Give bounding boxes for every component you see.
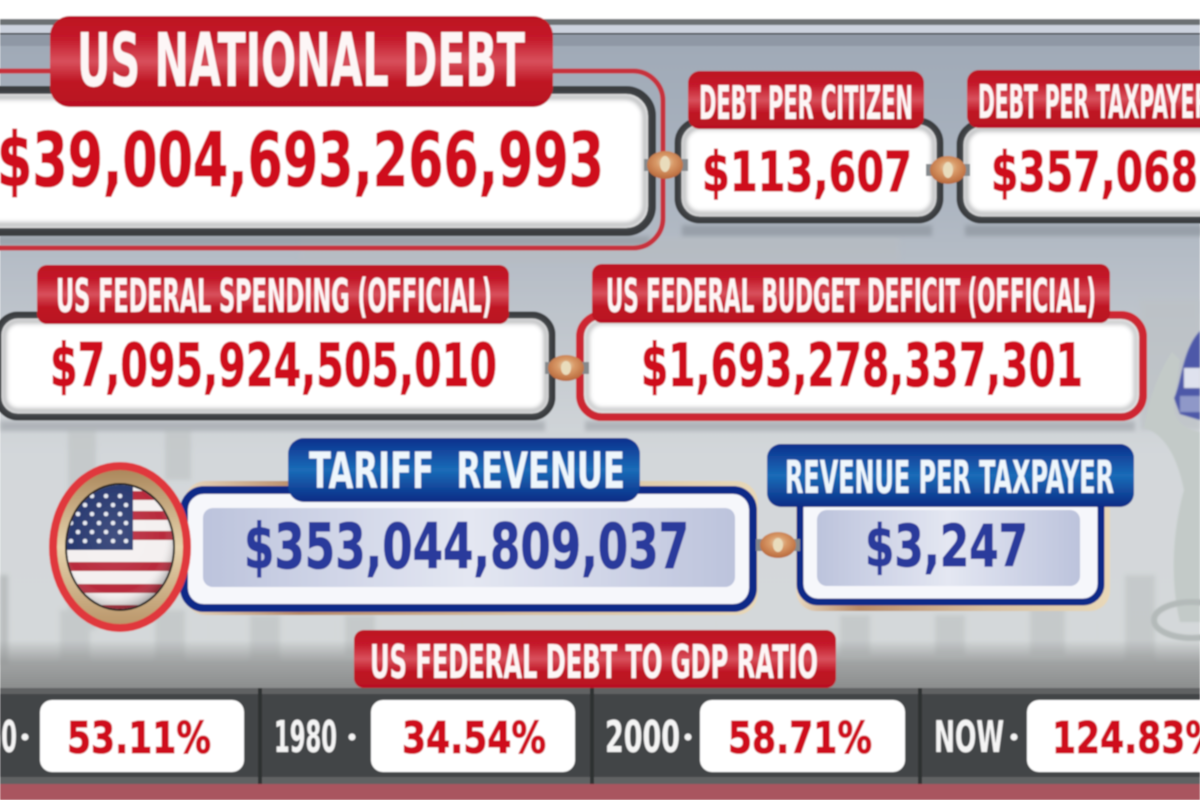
footer band (0, 784, 1200, 800)
connector: tariff to per taxpayer (756, 532, 800, 558)
icon: us flag medallion (53, 466, 187, 628)
era: 2000 (605, 700, 905, 772)
panel: tariff revenue (184, 438, 758, 615)
era: 1960 (0, 700, 244, 772)
value: national debt: $39,004,693,266,993 (0, 116, 604, 204)
value: revenue per taxpayer: $3,247 (865, 512, 1028, 580)
background: grey fog band (0, 640, 1200, 690)
heading: us federal debt to gdp ratio: US FEDERAL DEBT TO GDP RATIO (370, 635, 818, 689)
heading: tariff revenue: TARIFF REVENUE (309, 442, 625, 500)
panel: revenue per taxpayer (767, 444, 1134, 611)
era: 1980: 34.54% (402, 713, 546, 764)
panel: debt to gdp strip (0, 688, 1200, 784)
panel: us federal spending (0, 265, 552, 431)
heading: tariff revenue (288, 438, 640, 502)
era: 1960: 53.11% (67, 713, 211, 764)
value: tariff revenue: $353,044,809,037 (244, 510, 689, 583)
heading: us national debt (50, 16, 553, 107)
era: 1980: 1980 (274, 712, 337, 763)
connector: debt to citizen (644, 151, 688, 179)
connector: spending to deficit (545, 355, 589, 381)
panel: debt per citizen: DEBT PER CITIZEN (699, 76, 913, 130)
era: 2000: 2000 (605, 712, 680, 763)
background: white house skyline (0, 237, 1200, 665)
era: 2000: 58.71% (728, 713, 872, 764)
panel: us national debt (0, 16, 663, 248)
era: now: NOW (934, 712, 1004, 763)
value: federal spending: $7,095,924,505,010 (50, 331, 497, 401)
panel: debt per taxpayer (960, 70, 1200, 236)
heading: us national debt: US NATIONAL DEBT (77, 18, 525, 104)
heading: us federal debt to gdp ratio (354, 630, 836, 689)
era: now (934, 700, 1200, 772)
panel: us federal budget deficit (580, 264, 1143, 431)
heading: us federal spending (37, 265, 509, 324)
era: 1980 (274, 700, 575, 772)
connector: citizen to taxpayer (926, 156, 970, 184)
value: debt per citizen: $113,607 (702, 140, 912, 204)
heading: revenue per taxpayer (767, 444, 1134, 507)
heading: us federal spending: US FEDERAL SPENDING (OFFICIAL) (56, 269, 492, 323)
panel: debt per citizen (678, 71, 940, 236)
illustration: statue carrying capitol dome (1144, 331, 1200, 638)
heading: debt per citizen (688, 71, 924, 130)
